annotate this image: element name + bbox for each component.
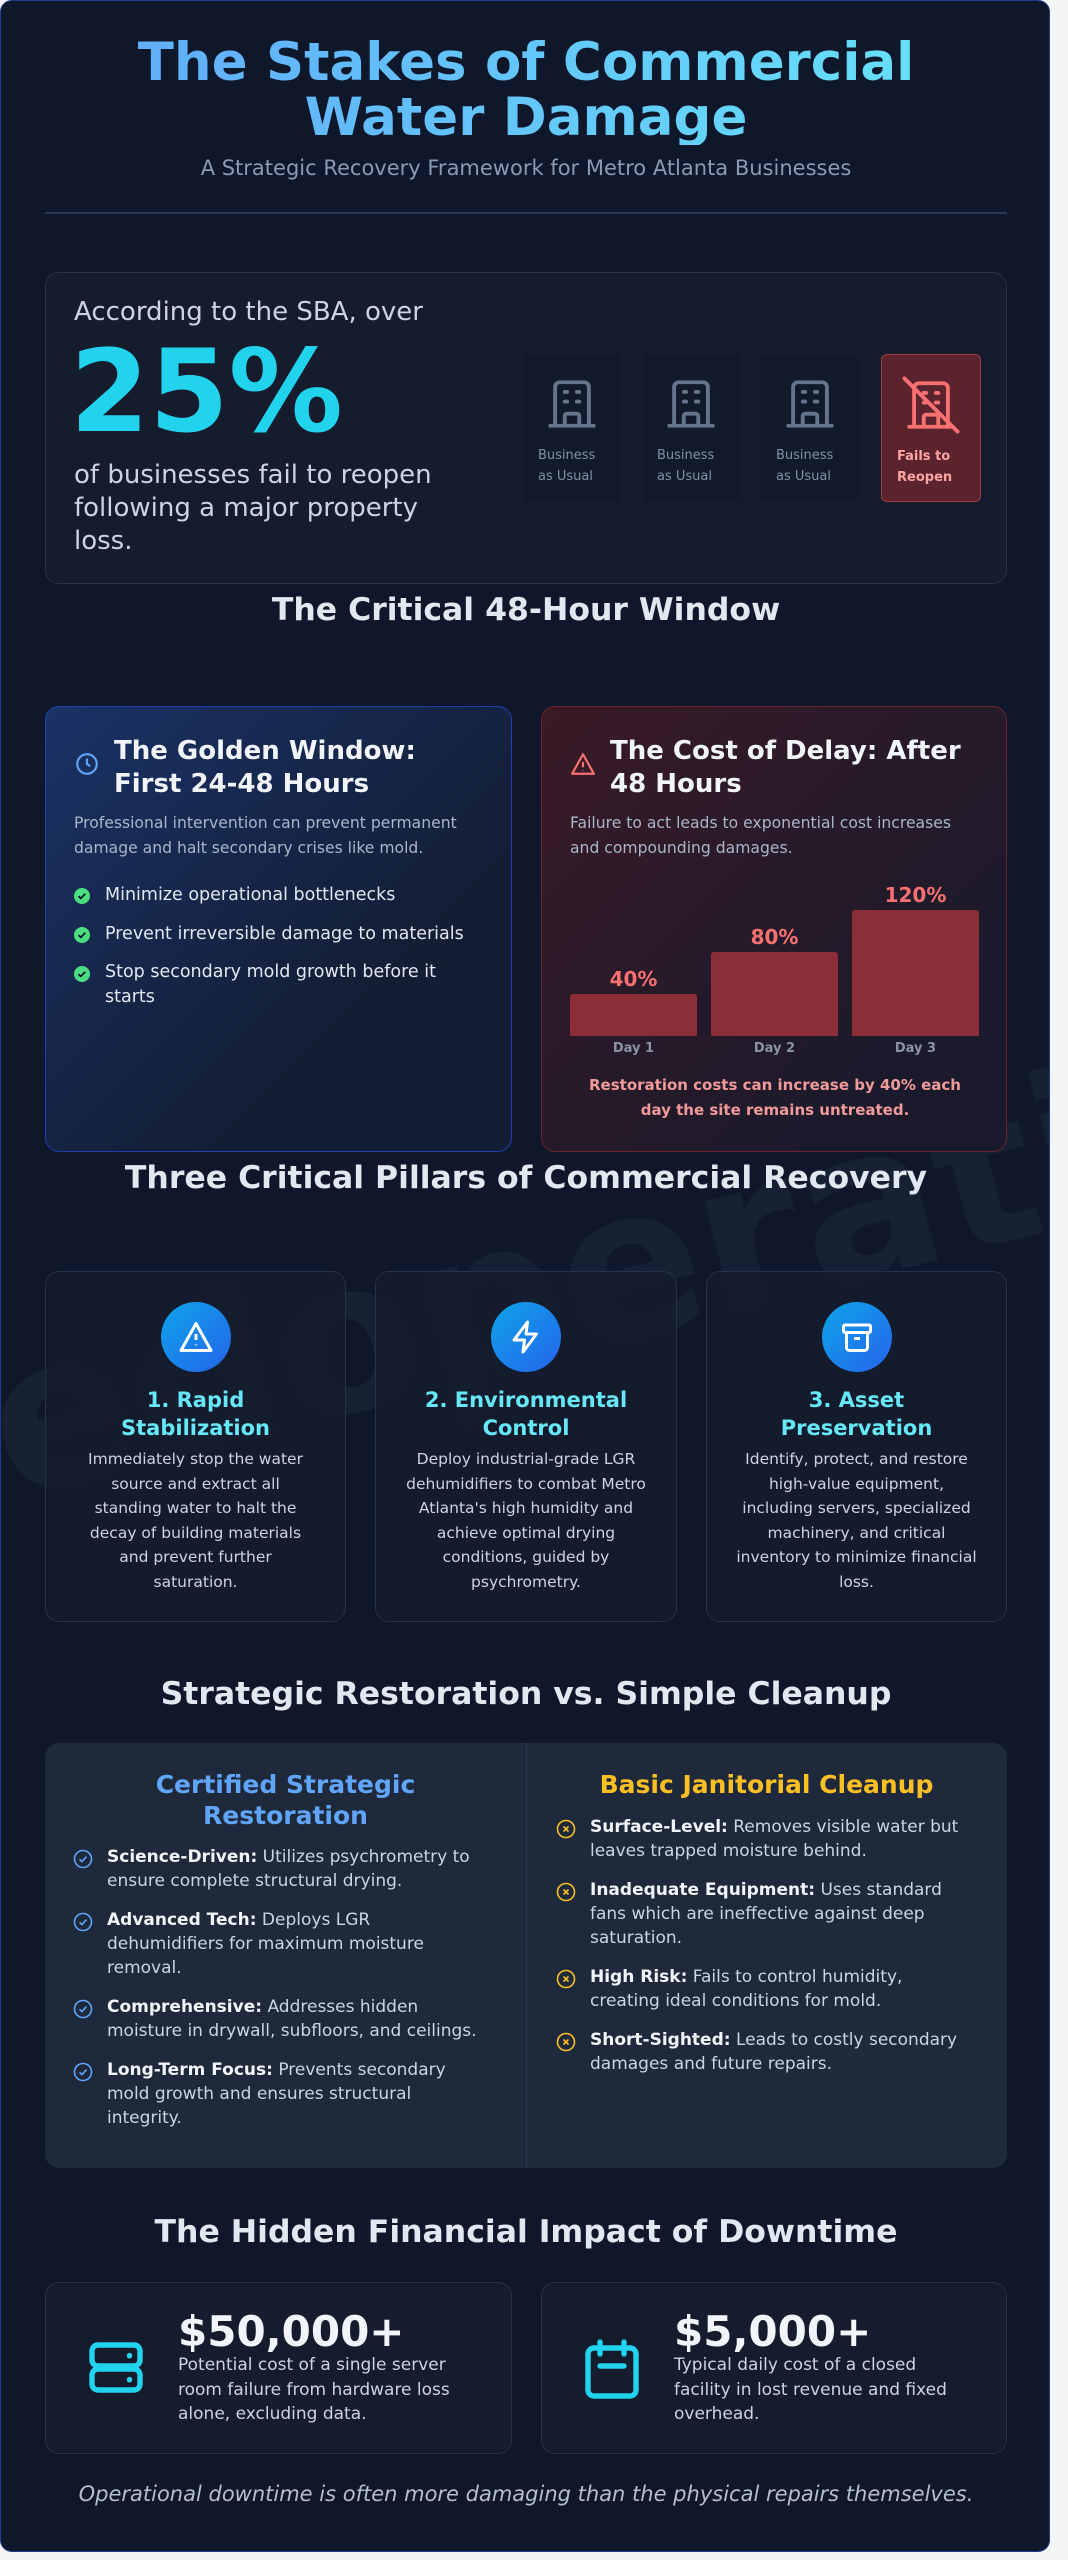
big number 25%: 25% (70, 325, 343, 458)
panel: pillar 1 (45, 1271, 346, 1622)
panel: golden window (45, 706, 512, 1152)
bar chart: Day 1 (613, 1041, 654, 1056)
panel: pillar 3: including servers, specialized (742, 1499, 971, 1517)
panel: pillar 1: Stabilization (121, 1416, 270, 1440)
icon: calendar (585, 2339, 639, 2399)
panel: pillar 2: 2. Environmental (425, 1388, 627, 1412)
icon: clock (76, 753, 98, 775)
icon: server (89, 2342, 143, 2393)
heading: financial impact: The Hidden Financial Impact of Downtime (155, 2214, 897, 2250)
panel: pillar 3: Preservation (781, 1416, 932, 1440)
icon: lightning (491, 1302, 561, 1372)
column: janitorial cleanup: Basic Janitorial Cleanup (600, 1770, 933, 1799)
icon: building 2: as Usual (657, 469, 712, 484)
panel: pillar 2: Deploy industrial-grade LGR dehumidifiers to combat Metro Atlanta's high humidity and achieve optimal drying conditions, guided by psychrometry. (406, 1450, 646, 1590)
panel: pillar 3: 3. Asset (809, 1388, 904, 1412)
golden window title: First 24-48 Hours (114, 769, 369, 799)
icon: building 3 (761, 354, 859, 502)
icon: building 2: Business (657, 448, 714, 463)
column: janitorial cleanup: Inadequate Equipment: Uses standard fans which are ineffective against deep saturation. (590, 1880, 942, 1948)
panel: server cost (45, 2282, 512, 2454)
column: janitorial cleanup (556, 1770, 958, 2074)
golden window title (114, 736, 416, 799)
icon: failed building (881, 354, 981, 502)
panel: pillar 3: Identify, protect, and restore (745, 1450, 968, 1468)
panel: pillar 1: 1. Rapid (147, 1388, 244, 1412)
cost of delay title: The Cost of Delay: After (610, 736, 961, 766)
footer note: Operational downtime is often more damaging than the physical repairs themselves. (79, 2482, 973, 2506)
panel: pillar 3: high-value equipment, (769, 1474, 944, 1492)
column: certified restoration: Long-Term Focus: Prevents secondary mold growth and ensures structural integrity. (107, 2060, 446, 2128)
bar chart: 40% (610, 967, 657, 991)
column: janitorial cleanup: High Risk: Fails to control humidity, creating ideal conditions for mold. (590, 1967, 902, 2011)
column: certified restoration: Science-Driven: Utilizes psychrometry to ensure complete structural drying. (107, 1847, 470, 1891)
panel: pillar 2: Control (483, 1416, 569, 1440)
bar chart: 80% (751, 925, 798, 949)
panel: daily closure cost: Typical daily cost of a closed facility in lost revenue and fixed overhead. (674, 2355, 947, 2424)
bar chart: Day 2 (754, 1041, 795, 1056)
bar chart (570, 883, 979, 1056)
icon: building 1: as Usual (538, 469, 593, 484)
title: The Stakes of Commercial (138, 32, 914, 93)
icon: building 1 (523, 354, 621, 502)
heading: 48-hour window: The Critical 48-Hour Window (272, 592, 780, 628)
icon: warning (160, 1302, 230, 1372)
checklist: Stop secondary mold growth before it starts (105, 962, 436, 1007)
panel: pillar 3: loss. (839, 1572, 874, 1590)
heading: strategic vs cleanup: Strategic Restoration vs. Simple Cleanup (161, 1676, 891, 1712)
stat description: of businesses fail to reopen following a major property loss. (74, 460, 432, 556)
checklist: Prevent irreversible damage to materials (105, 924, 464, 944)
column: janitorial cleanup: Short-Sighted: Leads to costly secondary damages and future repairs. (590, 2030, 957, 2074)
heading: three pillars: Three Critical Pillars of Commercial Recovery (125, 1160, 927, 1196)
column: certified restoration: Advanced Tech: Deploys LGR dehumidifiers for maximum moisture removal. (107, 1910, 424, 1978)
icon: failed building: Reopen (897, 470, 952, 485)
column: janitorial cleanup: Surface-Level: Removes visible water but leaves trapped moisture behind. (590, 1817, 958, 1861)
icon: warning (571, 753, 595, 775)
bar chart: 120% (885, 883, 946, 907)
icon: building 1: Business (538, 448, 595, 463)
icon: building 2 (642, 354, 740, 502)
panel: pillar 2 (375, 1271, 677, 1622)
icon: building 3: as Usual (776, 469, 831, 484)
panel: cost of delay (541, 706, 1007, 1152)
panel: daily closure cost (541, 2282, 1007, 2454)
golden window description: Professional intervention can prevent permanent damage and halt secondary crises like mold. (74, 814, 457, 857)
checklist: Minimize operational bottlenecks (105, 885, 395, 905)
cost of delay title (610, 736, 961, 799)
column: certified restoration: Comprehensive: Addresses hidden moisture in drywall, subfloors, and ceilings. (107, 1997, 477, 2041)
subtitle: A Strategic Recovery Framework for Metro Atlanta Businesses (201, 156, 851, 180)
icon: building 3: Business (776, 448, 833, 463)
icon: failed building: Fails to (897, 449, 950, 464)
panel: pillar 3: machinery, and critical (767, 1524, 946, 1542)
cost of delay description: Failure to act leads to exponential cost increases and compounding damages. (570, 814, 951, 857)
cost of delay title: 48 Hours (610, 769, 742, 799)
column: certified restoration: Certified Strategic (156, 1770, 415, 1799)
panel: pillar 3: inventory to minimize financial (736, 1548, 977, 1566)
panel: comparison (45, 1743, 1007, 2168)
icon: archive (822, 1302, 892, 1372)
title: Water Damage (305, 87, 747, 148)
golden window title: The Golden Window: (114, 736, 416, 766)
bar chart: Day 3 (895, 1041, 936, 1056)
stat intro text: According to the SBA, over (74, 297, 423, 327)
panel: SBA statistic (45, 272, 1007, 584)
panel: pillar 3 (706, 1271, 1007, 1622)
panel: daily closure cost: $5,000+ (674, 2307, 871, 2356)
panel: server cost: Potential cost of a single server room failure from hardware loss alone, excluding data. (178, 2355, 450, 2424)
panel: server cost: $50,000+ (178, 2307, 404, 2356)
chart caption: Restoration costs can increase by 40% each day the site remains untreated. (589, 1076, 961, 1119)
panel: pillar 1: Immediately stop the water source and extract all standing water to halt the decay of building materials and prevent further saturation. (88, 1450, 303, 1590)
title (1, 35, 1051, 145)
column: certified restoration: Restoration (203, 1801, 368, 1830)
checklist (74, 885, 464, 1007)
column: certified restoration (74, 1770, 477, 2128)
